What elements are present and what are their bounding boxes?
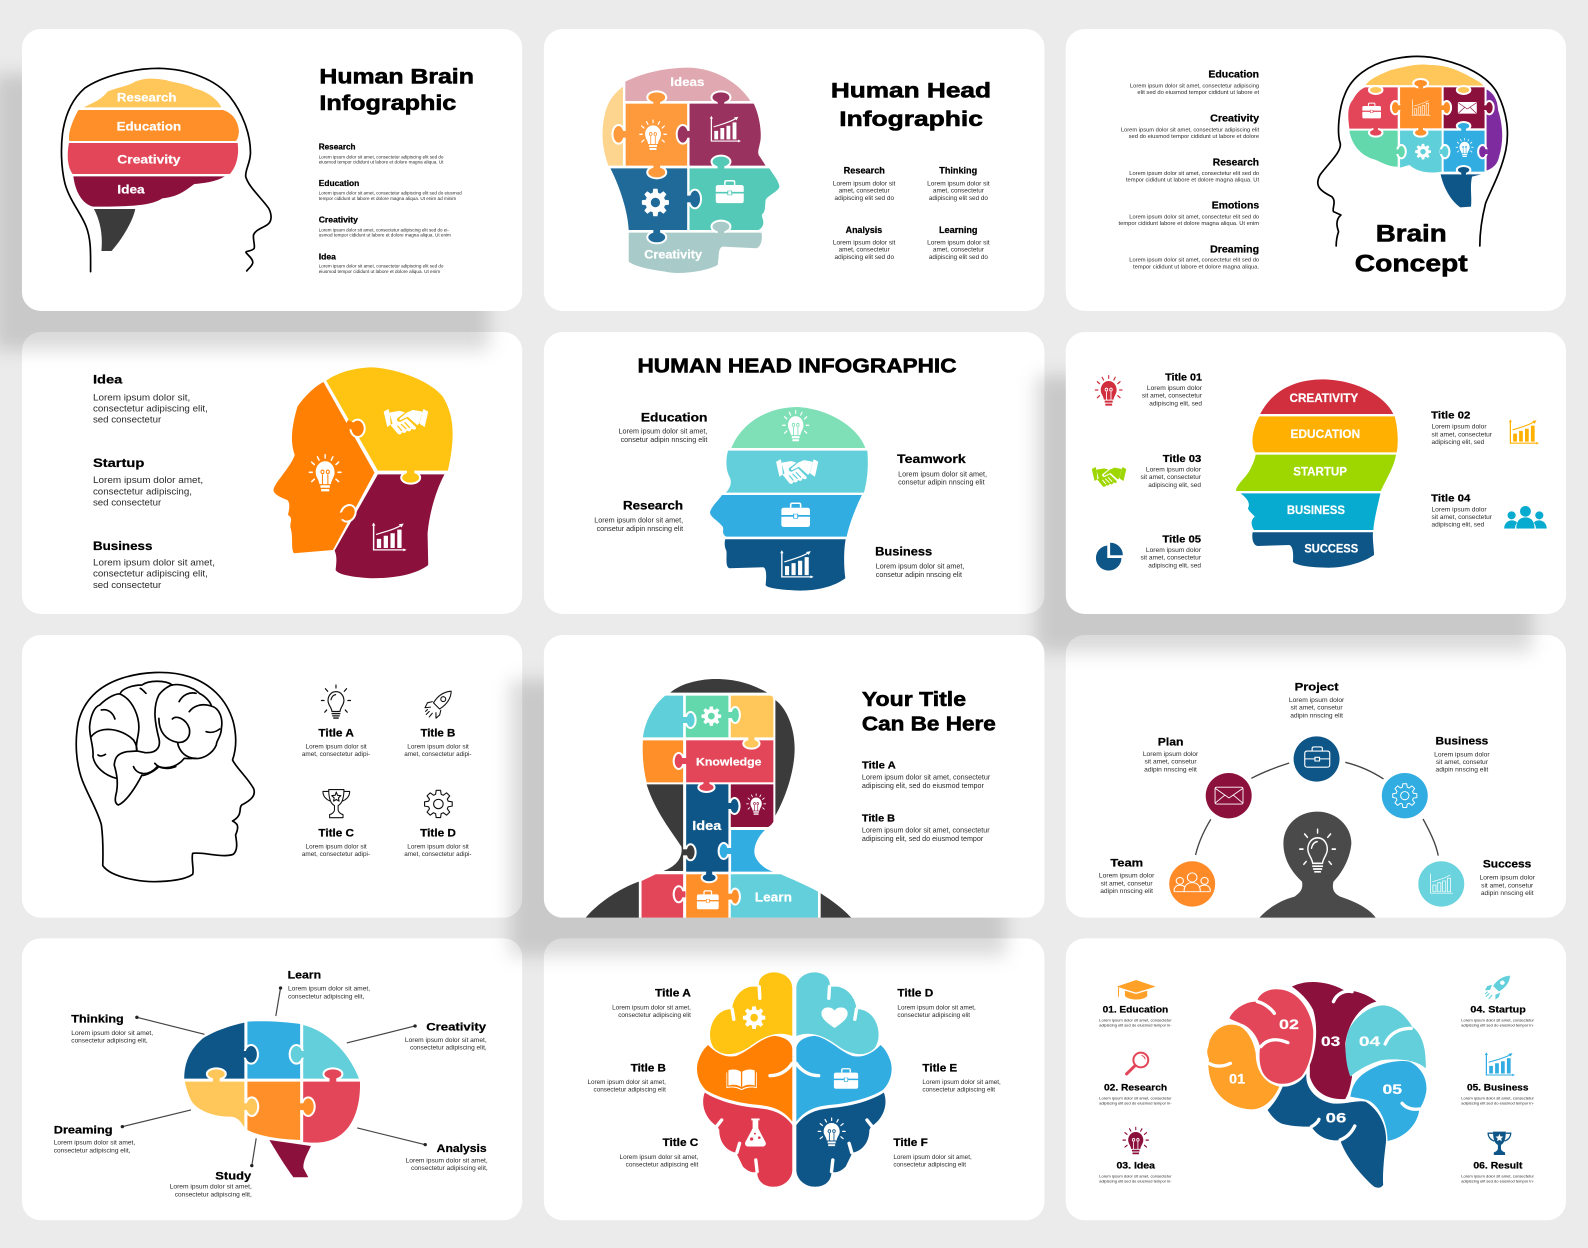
text block: titles A and B: adipiscing elit, sed do eiusmod tempor [862,783,985,790]
text block: titles 01 to 05: Lorem ipsum dolor [1146,547,1202,554]
text block: callout labels: Lorem ipsum dolor sit amet, [170,1184,252,1191]
text block: titles A to F: Title C [662,1137,699,1149]
text block: titles A and B: Title B [862,814,896,825]
text block: topics: eiusmod tempor cididunt ut labore et dolore magna aliqua. Ut [319,160,444,165]
text block: five labels: adipin nnscing elit [1481,890,1534,897]
title: Infographic [319,92,457,115]
banded head: CREATIVITY [1290,392,1358,405]
text block: five labels: Team [1110,858,1143,870]
text block: five topics: Creativity [1210,114,1260,125]
icon grid: titles A to D: Lorem ipsum dolor sit [306,745,367,751]
text block: five topics: tempor cididunt ut labore et dolore magna aliqua. Ut [1126,178,1260,184]
text block: titles 01 to 05: adipiscing elit, sed [1431,522,1485,529]
text block: four topics: Lorem ipsum dolor sit [927,239,990,246]
text block: titles 01 to 05: Title 02 [1431,410,1471,421]
title [831,77,991,131]
icon grid: titles A to D: Lorem ipsum dolor sit [407,845,469,851]
text block: labels: Business [875,544,932,558]
text block: five labels: sit amet, consetur [1101,880,1154,887]
puzzle person: Knowledge [696,757,762,769]
icon grid: titles A to D: amet, consectetur adipi- [404,752,472,758]
text block: topics: tempor cididunt ut labore et dolore magna aliqua. Ut enim ad minim [319,196,457,201]
title [862,688,996,735]
text block: callout labels: Creativity [426,1022,487,1034]
text block: idea, startup, business: Business [93,539,153,553]
text block: four topics: Learning [939,225,978,235]
title: Human Brain [319,65,474,88]
banded head: SUCCESS [1304,542,1358,555]
layered brain: Research [117,90,176,104]
text block: five topics: Lorem ipsum dolor sit amet, consectetur adipiscing [1130,83,1259,89]
right icon list: 05. Business [1467,1082,1528,1093]
brain right hemisphere [796,972,892,1187]
text block: callout labels: consectetur adipiscing elit, [288,993,365,1000]
text block: titles A to F: Title A [655,987,691,999]
panel: brain concept [1066,29,1566,311]
text block: four topics: amet, consectetur [839,188,891,195]
left icon list: adipiscing elit sed do eiusmod tempor in- [1099,1179,1172,1183]
text block: labels: consetur adipin nnscing elit [621,437,707,444]
text block: titles 01 to 05 [1140,373,1493,570]
text block: titles 01 to 05: Lorem ipsum dolor [1147,385,1203,392]
text block: callout labels: consectetur adipiscing elit, [411,1165,488,1172]
text block: idea, startup, business: Lorem ipsum dolor amet, [93,474,203,485]
text block: four topics: adipiscing elit sed do [929,254,988,261]
left icon list: Lorem ipsum dolor sit amet, consectetur [1099,1096,1172,1100]
text block: five labels: adipin nnscing elit [1144,767,1197,774]
text block: idea, startup, business: Idea [93,372,122,386]
text block: titles 01 to 05: Lorem ipsum dolor [1146,466,1202,473]
title: Brain [1376,220,1447,247]
left icon list: Lorem ipsum dolor sit amet, consectetur [1099,1174,1172,1178]
text block: titles 01 to 05: Lorem ipsum dolor [1431,424,1487,431]
text block: titles 01 to 05: Lorem ipsum dolor [1431,506,1487,513]
text block: topics: Education [319,179,359,188]
puzzle person: Idea [692,818,722,833]
text block: four topics: Research [844,166,885,176]
layered brain: Education [117,120,181,134]
text block: titles A to F: Lorem ipsum dolor sit amet, [587,1080,666,1086]
three piece head [274,367,453,578]
left icon list: 02. Research [1104,1082,1167,1093]
numbered brain [1207,982,1426,1188]
banded head: STARTUP [1293,466,1347,479]
icon grid: titles A to D [302,685,472,858]
callout lines [121,986,427,1167]
title [1355,220,1468,278]
text block: five labels: adipin nnscing elit [1100,888,1153,895]
panel: startup puzzle head [22,332,522,614]
text block: titles 01 to 05: sit amet, consectetur [1142,393,1203,400]
text block: topics: eiusmod tempor cididunt ut labore et dolore aliqua. Ut enim [319,269,440,274]
numbered brain: 05 [1382,1081,1402,1097]
text block: five labels [1099,682,1536,897]
text block: idea, startup, business: consectetur adipiscing, [93,485,192,496]
icon grid: titles A to D: Title B [420,727,455,739]
text block: five topics [1119,70,1260,270]
panel: project arc around head [1066,635,1566,918]
text block: callout labels: Lorem ipsum dolor sit amet, [406,1157,488,1164]
text block: titles A to F: Lorem ipsum dolor sit amet, [897,1005,976,1011]
layered brain: Creativity [117,153,181,167]
text block: callout labels: consectetur adipiscing elit, [175,1192,252,1199]
text block: idea, startup, business: Lorem ipsum dolor sit, [93,391,190,402]
text block: callout labels: consectetur adipiscing elit, [54,1148,131,1155]
text block: titles A to F: Lorem ipsum dolor sit amet, [922,1080,1001,1086]
text block: labels [594,411,987,579]
panel: colored band head with titles [1066,332,1566,614]
text block: callout labels: Study [215,1170,252,1182]
icon grid: titles A to D: Title A [318,727,354,739]
text block: titles A to F: Title B [631,1062,666,1074]
text block: callout labels: Lorem ipsum dolor sit amet, [54,1140,135,1147]
text block: five labels: adipin nnscing elit [1436,767,1489,774]
panel: numbered anatomical brain [1066,938,1566,1220]
text block: idea, startup, business: Lorem ipsum dolor sit amet, [93,556,215,567]
text block: titles A and B: Title A [862,761,896,772]
text block: titles A to F: Title F [893,1137,928,1149]
left icon list: 03. Idea [1116,1160,1156,1171]
text block: topics: Creativity [319,216,358,225]
text block: titles 01 to 05: adipiscing elit, sed [1431,439,1485,446]
text block: five topics: Lorem ipsum dolor sit amet, consectetur adipiscing elit [1121,127,1260,133]
text block: five labels: sit amet, consetur [1291,705,1343,712]
text block: four topics: Thinking [939,166,977,176]
numbered brain: 02 [1279,1016,1299,1032]
text block: titles 01 to 05: adipiscing elit, sed [1148,482,1201,489]
text block: four topics: adipiscing elit sed do [835,195,894,202]
text block: topics [319,143,462,274]
text block: five labels: Lorem ipsum dolor [1289,697,1345,704]
right icon list: 06. Result [1473,1160,1522,1171]
text block: idea, startup, business: sed consectetur [93,413,161,424]
icon grid: titles A to D: amet, consectetur adipi- [302,752,370,758]
right icon list: adipiscing elit sed do eiusmod tempor in- [1461,1023,1535,1027]
text block: labels: Lorem ipsum dolor sit amet, [619,429,707,436]
text block: five topics: Emotions [1212,201,1259,212]
text block: four topics: Analysis [846,225,882,235]
head and brain outline [76,672,254,882]
puzzle brain [1348,65,1502,207]
text block: idea, startup, business: consectetur adipiscing elit, [93,403,208,414]
text block: titles A to F [587,987,1001,1169]
text block: callout labels: Lorem ipsum dolor sit amet, [71,1030,153,1037]
text block: labels: Research [623,499,683,513]
title: Your Title [862,688,966,711]
text block: labels: Lorem ipsum dolor sit amet, [898,471,987,478]
text block: five labels: Lorem ipsum dolor [1434,751,1491,758]
panel: puzzle brain with callouts [22,938,522,1220]
panel: puzzle silhouette [544,635,1044,918]
text block: callout labels: Lorem ipsum dolor sit amet, [405,1037,487,1044]
text block: idea, startup, business: sed consectetur [93,579,161,590]
text block: idea, startup, business: sed consectetur [93,496,161,507]
text block: titles 01 to 05: Title 05 [1162,535,1201,546]
layered brain [68,79,239,251]
title: Can Be Here [862,712,996,735]
text block: five labels: Lorem ipsum dolor [1479,875,1536,882]
text block: callout labels: Dreaming [54,1125,113,1137]
text block: five topics: tempor cididunt labore et dolore magna aliqua. Ut enim [1119,221,1259,227]
text block: callout labels: Lorem ipsum dolor sit amet, [288,985,370,992]
text block: topics: Lorem ipsum dolor sit amet, consectetur adipiscing elit sed do eiusmod [319,191,462,196]
text block: four topics: Lorem ipsum dolor sit [833,180,896,187]
text block: titles A to F: Lorem ipsum dolor sit amet, [893,1155,972,1161]
puzzle head: Ideas [670,75,705,89]
icon grid: titles A to D: Title C [318,827,354,839]
right icon list: Lorem ipsum dolor sit amet, consectetur [1461,1018,1535,1022]
circle icons [1169,736,1464,907]
text block: callout labels: Thinking [71,1014,124,1026]
text block: five labels: adipin nnscing elit [1290,712,1343,719]
text block: five labels: Business [1436,736,1488,748]
text block: topics: Idea [319,252,337,261]
text block: callout labels: consectetur adipiscing elit, [410,1045,487,1052]
text block: titles A and B [862,761,991,843]
text block: topics: Lorem ipsum dolor sit amet, consectetur adipiscing elit sed do [319,264,444,269]
panel: human brain infographic [22,29,522,311]
text block: four topics: adipiscing elit sed do [835,254,894,261]
text block: five topics: Education [1208,70,1259,81]
title: HUMAN HEAD INFOGRAPHIC [637,355,957,378]
text block: five labels: Project [1295,682,1339,694]
text block: four topics [833,166,990,261]
head outline [61,68,271,272]
puzzle person: Learn [755,890,792,905]
text block: titles A to F: consectetur adipiscing elit [618,1013,691,1019]
text block: labels: Lorem ipsum dolor sit amet, [876,564,964,571]
panel: six part brain [544,938,1044,1220]
text block: idea, startup, business: Startup [93,456,145,470]
text block: titles 01 to 05: sit amet, consectetur [1431,514,1493,521]
title: Human Head [831,77,991,102]
text block: titles 01 to 05: Title 03 [1163,454,1202,465]
panel: human head puzzle infographic [544,29,1044,311]
text block: callout labels: Learn [288,970,321,982]
puzzle person [586,679,851,918]
text block: four topics: amet, consectetur [933,188,985,195]
text block: five labels: sit amet, consetur [1481,882,1534,889]
brain icons [727,1006,858,1147]
text block: five labels: Success [1483,858,1531,870]
puzzle brain [184,1021,360,1177]
text block: titles A to F: consectetur adipiscing elit [626,1163,699,1169]
right icon list [1461,976,1535,1183]
text block: callout labels: Analysis [437,1143,487,1155]
banded head: BUSINESS [1287,504,1345,517]
puzzle head [603,68,779,273]
right icon list: 04. Startup [1470,1004,1526,1015]
text block: idea, startup, business [93,372,215,590]
text block: five labels: Lorem ipsum dolor [1099,873,1155,880]
text block: topics: Lorem ipsum dolor sit amet, consectetur adipiscing elit sed do [319,154,444,159]
arc connectors [1196,762,1438,856]
silhouette with bulb [1259,812,1376,918]
icon grid: titles A to D: Title D [420,827,456,839]
text block: titles 01 to 05: Title 01 [1165,373,1202,384]
puzzle head: Creativity [644,248,702,262]
title [319,65,474,115]
text block: four topics: Lorem ipsum dolor sit [833,239,896,246]
right icon list: adipiscing elit sed do eiusmod tempor in- [1461,1179,1535,1183]
numbered brain: 06 [1326,1109,1347,1125]
side icons [1092,376,1547,571]
text block: labels: Lorem ipsum dolor sit amet, [594,518,683,525]
text block: five topics: Lorem ipsum dolor sit amet, consectetur elit sed do [1129,214,1259,220]
text block: titles 01 to 05: adipiscing elit, sed [1148,563,1201,570]
text block: titles A and B: Lorem ipsum dolor sit amet, consectetur [862,775,991,782]
text block: titles A to F: consectetur adipiscing elit [594,1088,666,1094]
text block: titles A to F: consectetur adipiscing elit [897,1013,970,1019]
text block: five topics: tempor cididunt ut labore et dolore magna aliqua. [1133,264,1259,270]
text block: callout labels: consectetur adipiscing elit, [71,1038,148,1045]
brain left hemisphere [697,972,792,1187]
text block: four topics: Lorem ipsum dolor sit [927,180,990,187]
text block: five topics: Lorem ipsum dolor sit amet, consectetur elit sed do [1129,258,1259,264]
left icon list: adipiscing elit sed do eiusmod tempor in- [1099,1023,1172,1027]
numbered brain: 01 [1229,1070,1245,1086]
text block: four topics: adipiscing elit sed do [929,195,988,202]
text block: titles 01 to 05: sit amet, consectetur [1431,431,1493,438]
text block: callout labels [54,970,488,1199]
text block: five topics: Dreaming [1210,244,1259,255]
text block: titles A to F: consectetur adipiscing elit [893,1163,966,1169]
text block: five topics: Lorem ipsum dolor sit amet, consectetur elit sed do [1129,171,1259,177]
text block: labels: consetur adipin nnscing elit [597,526,683,533]
text block: titles 01 to 05: sit amet, consectetur [1140,474,1202,481]
title: Concept [1355,251,1468,278]
text block: labels: consetur adipin nnscing elit [898,480,985,487]
panel: banded human head infographic [544,332,1044,614]
text block: titles A to F: Lorem ipsum dolor sit amet, [620,1155,699,1161]
text block: five labels: Lorem ipsum dolor [1143,751,1199,758]
icon grid: titles A to D: Lorem ipsum dolor sit [407,745,469,751]
head outline [1318,56,1507,246]
text block: titles A to F: consectetur adipiscing elit [922,1088,995,1094]
icon grid: titles A to D: Lorem ipsum dolor sit [306,845,367,851]
panel: line art brain with icons [22,635,522,918]
text block: titles A to F: Title E [922,1062,957,1074]
text block: titles 01 to 05: sit amet, consectetur [1140,555,1202,562]
left icon list [1099,980,1172,1183]
text block: topics: Lorem ipsum dolor sit amet, consectetur adipiscing elit sed do ei- [319,227,449,232]
text block: titles 01 to 05: adipiscing elit, sed [1149,401,1202,408]
text block: topics: Research [319,143,356,152]
text block: titles 01 to 05: Title 04 [1431,494,1471,505]
icon grid: titles A to D: amet, consectetur adipi- [404,852,472,858]
icon grid: titles A to D: amet, consectetur adipi- [302,852,370,858]
text block: five topics: Research [1213,157,1259,168]
left icon list: 01. Education [1103,1004,1168,1015]
text block: five topics: elit sed do eiusmod tempor cididunt ut labore et [1137,90,1260,96]
text block: titles A and B: Lorem ipsum dolor sit amet, consectetur [862,828,990,835]
text block: labels: Education [641,411,707,425]
text block: four topics: amet, consectetur [933,247,985,254]
text block: titles A to F: Lorem ipsum dolor sit amet, [612,1005,691,1011]
text block: five labels: Plan [1158,736,1183,748]
banded head [710,407,868,591]
right icon list: Lorem ipsum dolor sit amet, consectetur [1461,1174,1535,1178]
text block: titles A to F: Title D [897,987,934,999]
banded head: EDUCATION [1291,428,1360,441]
right icon list: adipiscing elit sed do eiusmod tempor in- [1461,1101,1535,1105]
text block: idea, startup, business: consectetur adipiscing elit, [93,568,208,579]
left icon list: Lorem ipsum dolor sit amet, consectetur [1099,1018,1172,1022]
text block: five labels: sit amet, consetur [1436,759,1489,766]
text block: topics: usmod tempor cididunt ut labore et dolore magna aliqua. Ut enim [319,233,451,238]
numbered brain: 03 [1321,1033,1340,1049]
text block: five labels: sit amet, consetur [1145,759,1197,766]
numbered brain: 04 [1359,1033,1380,1049]
text block: five topics: sed do eiusmod tempor cididunt ut labore et dolore [1129,134,1259,140]
title: Infographic [839,106,983,131]
right icon list: Lorem ipsum dolor sit amet, consectetur [1461,1096,1535,1100]
layered brain: Idea [117,183,145,197]
text block: labels: consetur adipin nnscing elit [876,572,962,579]
text block: labels: Teamwork [897,452,966,466]
text block: four topics: amet, consectetur [839,247,891,254]
banded head [1236,379,1398,568]
text block: titles A and B: adipiscing elit, sed do eiusmod tempor [862,836,984,843]
left icon list: adipiscing elit sed do eiusmod tempor in- [1099,1101,1172,1105]
